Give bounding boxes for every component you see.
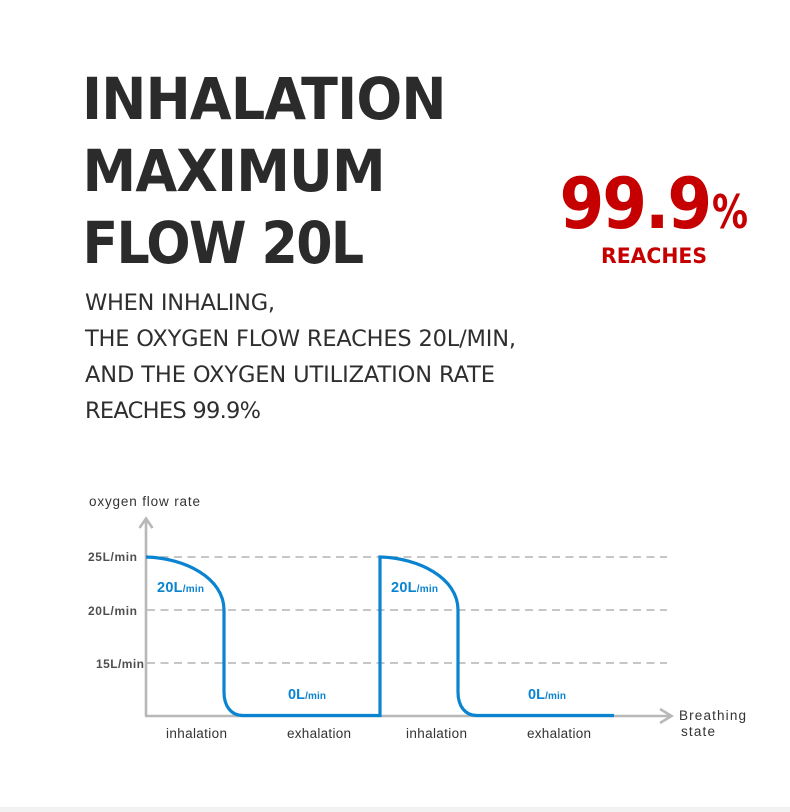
flow curve — [146, 557, 614, 716]
x axis title — [679, 708, 746, 739]
y axis labels: 25L/min — [88, 550, 137, 564]
x axis phase labels: exhalation — [287, 726, 351, 741]
flow value labels — [157, 580, 566, 703]
description text: WHEN INHALING, — [85, 290, 275, 316]
description text: AND THE OXYGEN UTILIZATION RATE — [85, 362, 495, 388]
description text — [84, 290, 516, 424]
x axis title: state — [681, 724, 715, 739]
x axis phase labels: inhalation — [406, 726, 467, 741]
y axis title: oxygen flow rate — [89, 494, 200, 509]
flow value labels: 20L/min — [157, 580, 204, 596]
bottom band — [0, 807, 790, 812]
title: FLOW 20L — [82, 210, 364, 278]
y axis labels: 15L/min — [96, 657, 144, 671]
flow value labels: 0L/min — [528, 687, 566, 703]
description text: THE OXYGEN FLOW REACHES 20L/MIN, — [84, 326, 516, 352]
grid lines — [147, 557, 667, 663]
description text: REACHES 99.9% — [85, 398, 261, 424]
x axis phase labels: exhalation — [527, 726, 591, 741]
chart: oxygen flow rate over breathing state — [88, 494, 746, 741]
callout: 99.9% reaches — [560, 163, 748, 268]
callout: 99.9% reaches: % — [712, 185, 748, 239]
x axis title: Breathing — [679, 708, 746, 723]
x axis phase labels — [166, 726, 591, 741]
title: INHALATION — [82, 66, 447, 133]
y axis labels: 20L/min — [88, 604, 137, 618]
callout: 99.9% reaches: REACHES — [601, 244, 707, 268]
title — [82, 66, 447, 278]
x axis phase labels: inhalation — [166, 726, 227, 741]
flow value labels: 20L/min — [391, 580, 438, 596]
axes with arrows — [140, 518, 672, 723]
callout: 99.9% reaches: 99.9 — [560, 163, 712, 245]
title: MAXIMUM — [82, 138, 386, 205]
y axis labels — [88, 550, 144, 671]
flow value labels: 0L/min — [288, 687, 326, 703]
